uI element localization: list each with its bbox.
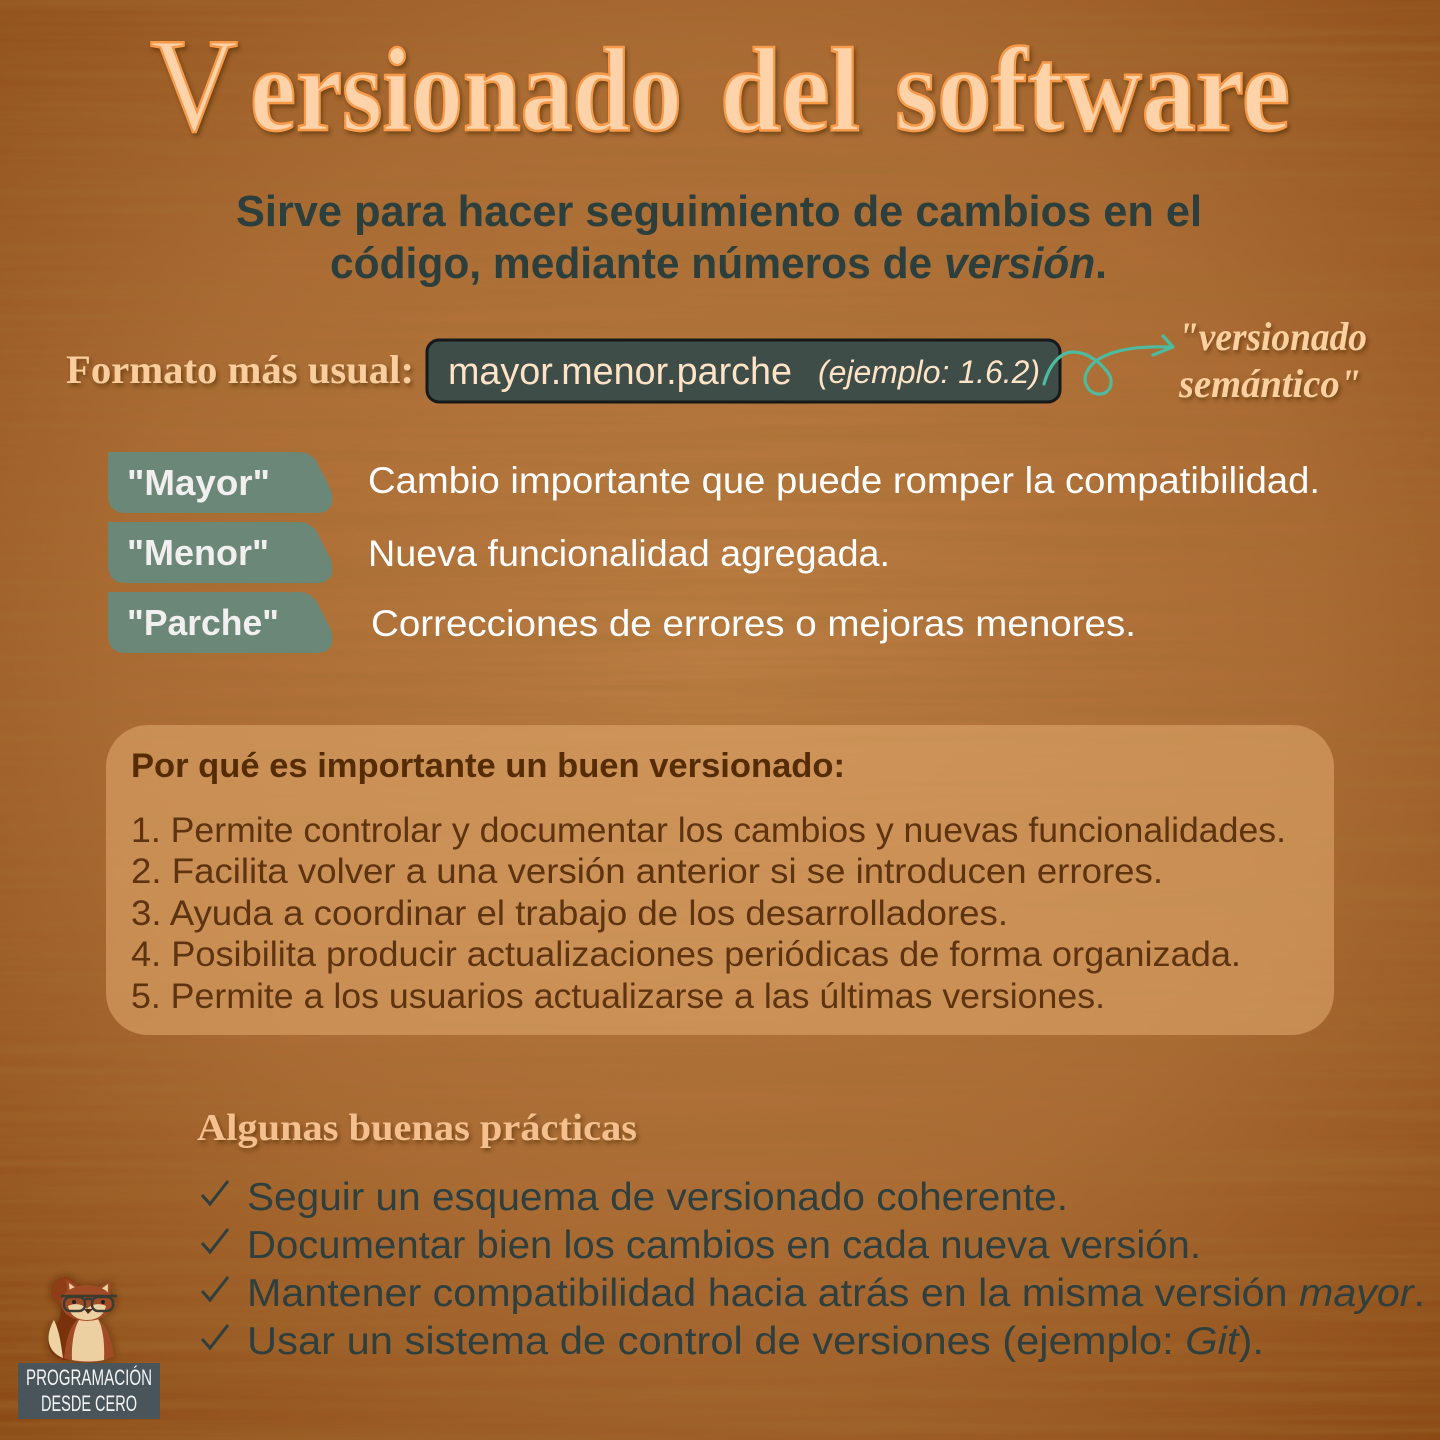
format pattern: mayor.menor.parche <box>448 351 792 393</box>
format label: Formato más usual: <box>66 347 414 392</box>
tag: Menor <box>108 522 332 583</box>
title word: software: software <box>895 23 1290 156</box>
panel list: 2. Facilita volver a una versión anterior si se introducen errores. <box>131 852 1163 891</box>
practice 1: Seguir un esquema de versionado coherente. <box>247 1176 1068 1219</box>
tag: Mayor: "Mayor" <box>127 462 270 503</box>
best practices list <box>202 1176 1425 1363</box>
title word: ersionado: ersionado <box>250 23 682 156</box>
logo label: PROGRAMACIÓN <box>26 1365 152 1390</box>
panel list <box>131 811 1286 1016</box>
tag: Parche <box>108 592 332 653</box>
icon: squirrel with glasses <box>48 1277 117 1362</box>
logo label: DESDE CERO <box>41 1391 137 1416</box>
format box <box>427 340 1060 402</box>
panel heading: Por qué es importante un buen versionado: <box>131 747 845 785</box>
note line 2: semántico" <box>1178 361 1361 406</box>
note line 1: "versionado <box>1178 314 1367 359</box>
tag: Mayor <box>108 452 332 513</box>
subtitle line 1: Sirve para hacer seguimiento de cambios en el <box>236 187 1202 236</box>
description: Parche: Correcciones de errores o mejoras menores. <box>371 603 1136 644</box>
description: Menor: Nueva funcionalidad agregada. <box>368 533 890 574</box>
title word: del: del <box>720 23 860 156</box>
subtitle line 2: código, mediante números de versión. <box>330 239 1107 288</box>
format example: (ejemplo: 1.6.2) <box>818 354 1040 390</box>
practice 2: Documentar bien los cambios en cada nueva versión. <box>247 1224 1201 1267</box>
description: Mayor: Cambio importante que puede romper la compatibilidad. <box>368 460 1320 501</box>
tag: Parche: "Parche" <box>127 602 279 643</box>
panel list: 4. Posibilita producir actualizaciones periódicas de forma organizada. <box>131 935 1241 974</box>
subtitle <box>236 187 1202 288</box>
arrow: curly teal arrow <box>1044 336 1173 394</box>
practice 4: Usar un sistema de control de versiones (ejemplo: Git). <box>247 1320 1264 1363</box>
semantic versioning note <box>1178 314 1367 406</box>
title <box>150 11 1290 159</box>
panel list: 5. Permite a los usuarios actualizarse a las últimas versiones. <box>131 977 1105 1016</box>
logo label <box>18 1363 160 1419</box>
panel list: 3. Ayuda a coordinar el trabajo de los desarrolladores. <box>131 894 1008 933</box>
panel list: 1. Permite controlar y documentar los cambios y nuevas funcionalidades. <box>131 811 1286 850</box>
best practices heading: Algunas buenas prácticas <box>197 1107 637 1149</box>
panel: why it matters <box>106 725 1334 1035</box>
tag: Menor: "Menor" <box>127 532 269 573</box>
title initial: V <box>150 11 238 159</box>
practice 3: Mantener compatibilidad hacia atrás en la misma versión mayor. <box>247 1272 1425 1315</box>
